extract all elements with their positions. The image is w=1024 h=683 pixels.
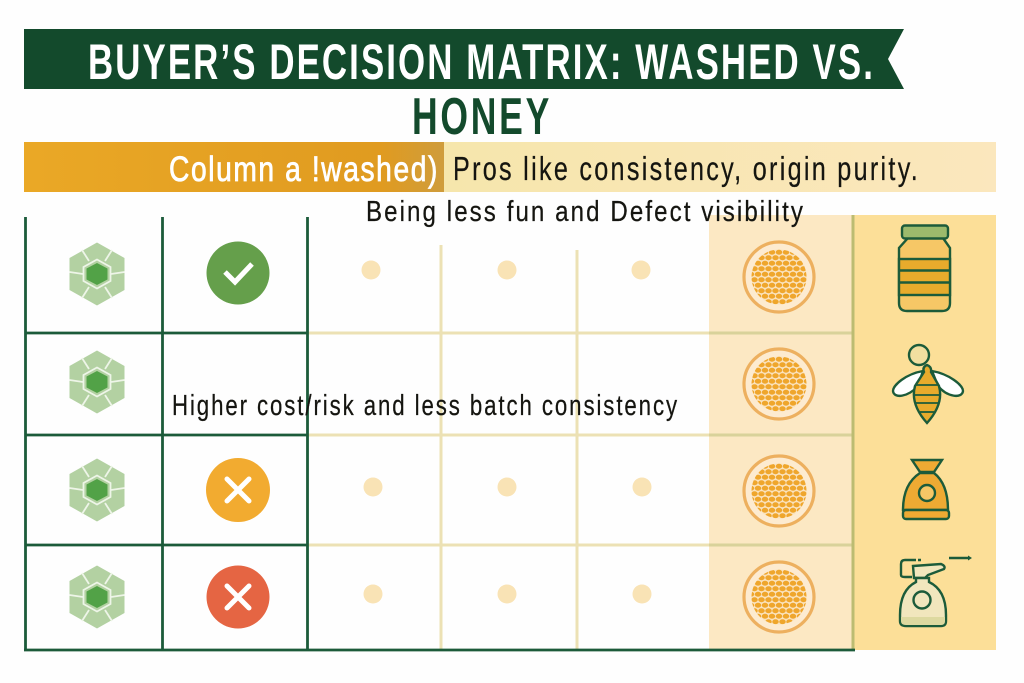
hexagon icons	[70, 242, 124, 628]
title second line: HONEY	[412, 88, 552, 146]
header bar	[24, 142, 996, 192]
column a label: Column a !washed)	[169, 150, 439, 189]
icon: honey jar	[899, 226, 950, 311]
icon: green check	[206, 242, 270, 304]
right tinted column	[709, 215, 853, 650]
higher cost text: Higher cost/risk and less batch consistency	[172, 390, 679, 422]
icon: red cross	[206, 566, 270, 628]
icon: bee	[893, 345, 963, 423]
grid lines	[24, 215, 855, 651]
icon: spray bottle	[900, 556, 972, 626]
honeycomb circles	[744, 242, 814, 632]
icon column background	[853, 215, 996, 650]
being less fun text: Being less fun and Defect visibility	[366, 196, 805, 228]
rating dots	[362, 260, 652, 604]
icon: honey sack	[903, 460, 949, 519]
icon: amber cross	[206, 458, 270, 522]
